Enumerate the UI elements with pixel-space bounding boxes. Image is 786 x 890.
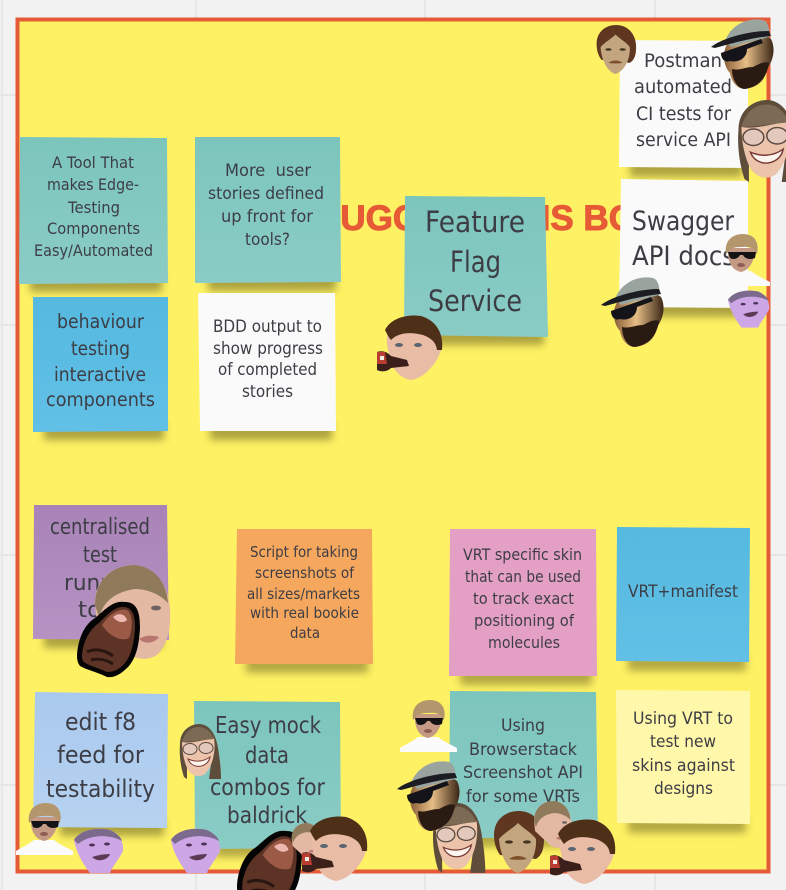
sticky: easy mock data combos: data: [245, 743, 289, 769]
sticky: postman CI tests: CI tests for: [636, 104, 731, 125]
sticky: easy mock data combos: combos for: [210, 775, 325, 801]
face: purple face right: [728, 291, 769, 328]
sticky: edit f8 feed: testability: [46, 775, 155, 803]
face: sunglasses man by browserstack sticky: [400, 700, 457, 752]
face: sunglasses man bottom left: [16, 803, 73, 855]
sticky: BDD output: [198, 293, 336, 440]
sticky: tool for edge testing: [19, 137, 168, 292]
face: upside-down black outline bottom: [237, 831, 302, 890]
sticky: script for screenshots: screenshots of: [255, 564, 355, 582]
sticky: tool for edge testing: Testing: [67, 198, 120, 217]
sticky: feature flag service: [404, 196, 548, 345]
sticky: browserstack screenshot API: Screenshot API: [463, 763, 583, 783]
face: bottle guy centre: [377, 316, 442, 380]
sticky: script for screenshots: [235, 529, 373, 673]
sticky: easy mock data combos: Easy mock: [215, 713, 322, 739]
sticky: script for screenshots: all sizes/markets: [247, 585, 360, 603]
sticky: browserstack screenshot API: Browserstack: [469, 740, 577, 760]
sticky: feature flag service: Flag: [450, 245, 501, 279]
sticky: BDD output: BDD output to: [213, 317, 322, 336]
sticky: tool for edge testing: makes Edge-: [47, 175, 139, 194]
face: cap and beard middle: [601, 277, 664, 347]
face: large smirk on purple sticky: [95, 565, 170, 659]
sticky: edit f8 feed: [33, 692, 168, 836]
sticky: postman CI tests: automated: [634, 77, 732, 98]
sticky: behaviour testing: testing: [71, 337, 130, 360]
sticky: swagger API docs: [619, 179, 748, 317]
sticky: VRT against designs: skins against: [632, 756, 736, 775]
sticky: script for screenshots: with real bookie: [250, 604, 359, 622]
sticky: tool for edge testing: Easy/Automated: [34, 241, 153, 260]
sticky: VRT against designs: designs: [654, 779, 713, 798]
sticky: script for screenshots: data: [290, 624, 320, 642]
sticky: VRT+manifest: [616, 527, 750, 671]
face: sunglasses man right: [713, 234, 770, 286]
sticky: VRT against designs: [616, 690, 750, 833]
face: glasses woman top right: [738, 100, 786, 182]
sticky: more user stories: stories defined: [208, 184, 324, 204]
face: glasses woman bottom: [433, 803, 485, 873]
sticky: behaviour testing: [33, 297, 168, 440]
sticky: postman CI tests: service API: [636, 130, 731, 151]
sticky: centralised test runner tool: [33, 505, 169, 648]
sticky: centralised test runner tool: runner: [64, 571, 137, 596]
face: cap and beard bottom: [397, 761, 460, 831]
face: small smirk bottom middle: [292, 823, 320, 859]
sticky: more user stories: More user: [225, 161, 311, 181]
sticky: edit f8 feed: feed for: [57, 741, 144, 769]
sticky: BDD output: of completed: [218, 360, 317, 379]
sticky: behaviour testing: components: [46, 388, 155, 411]
sticky: behaviour testing: interactive: [54, 363, 146, 386]
sticky: VRT specific skin: molecules: [488, 633, 560, 652]
face: redhead bottom: [494, 811, 544, 873]
sticky: edit f8 feed: edit f8: [65, 708, 136, 736]
sticky: BDD output: show progress: [213, 339, 323, 358]
face: bottle guy bottom middle: [302, 817, 367, 881]
sticky: centralised test runner tool: tool: [78, 598, 122, 623]
sticky: VRT specific skin: [449, 529, 597, 685]
sticky: more user stories: tools?: [245, 230, 290, 250]
sticky: swagger API docs: API docs: [632, 241, 735, 272]
sticky: VRT against designs: Using VRT to: [633, 709, 733, 728]
face: small smirk bottom right: [534, 801, 572, 848]
face: upside-down black outline on purple sticky: [77, 602, 140, 677]
sticky: more user stories: up front for: [221, 207, 313, 227]
sticky: easy mock data combos: [194, 701, 341, 857]
face: bottle guy bottom right: [550, 820, 615, 884]
face: glasses woman on mock data sticky: [180, 724, 221, 779]
sticky: feature flag service: Feature: [425, 205, 525, 239]
sticky: script for screenshots: Script for taking: [250, 543, 358, 561]
sticky: browserstack screenshot API: for some VRTs: [466, 787, 580, 807]
sticky: browserstack screenshot API: Using: [501, 716, 545, 736]
sticky: more user stories: [195, 137, 341, 291]
sticky: VRT specific skin: VRT specific skin: [463, 545, 582, 564]
sticky: centralised test runner tool: centralised: [50, 515, 150, 540]
sticky: behaviour testing: behaviour: [57, 310, 145, 333]
sticky: tool for edge testing: Components: [47, 219, 140, 238]
face: cap and beard top right: [711, 19, 774, 89]
sticky: BDD output: stories: [242, 382, 293, 401]
sticky: VRT specific skin: positioning of: [474, 611, 574, 630]
sticky: postman CI tests: Postman: [644, 51, 722, 72]
sticky: postman CI tests: [619, 40, 748, 177]
sticky: easy mock data combos: baldrick: [227, 803, 308, 829]
sticky: VRT+manifest: VRT+manifest: [628, 582, 738, 602]
sticky: centralised test runner tool: test: [83, 543, 117, 568]
face: redhead top right: [597, 25, 636, 74]
sticky: VRT against designs: test new: [650, 732, 716, 751]
sticky: VRT specific skin: that can be used: [465, 567, 581, 586]
face: purple face bottom left: [74, 829, 123, 873]
sticky: feature flag service: Service: [428, 284, 522, 318]
title: SUGGESTIONS BOX: [317, 199, 660, 238]
sticky: VRT specific skin: to track exact: [473, 589, 574, 608]
sticky: browserstack screenshot API: [449, 691, 598, 847]
face: purple face bottom second: [171, 829, 220, 873]
sticky: swagger API docs: Swagger: [632, 206, 735, 237]
sticky: tool for edge testing: A Tool That: [52, 153, 134, 172]
